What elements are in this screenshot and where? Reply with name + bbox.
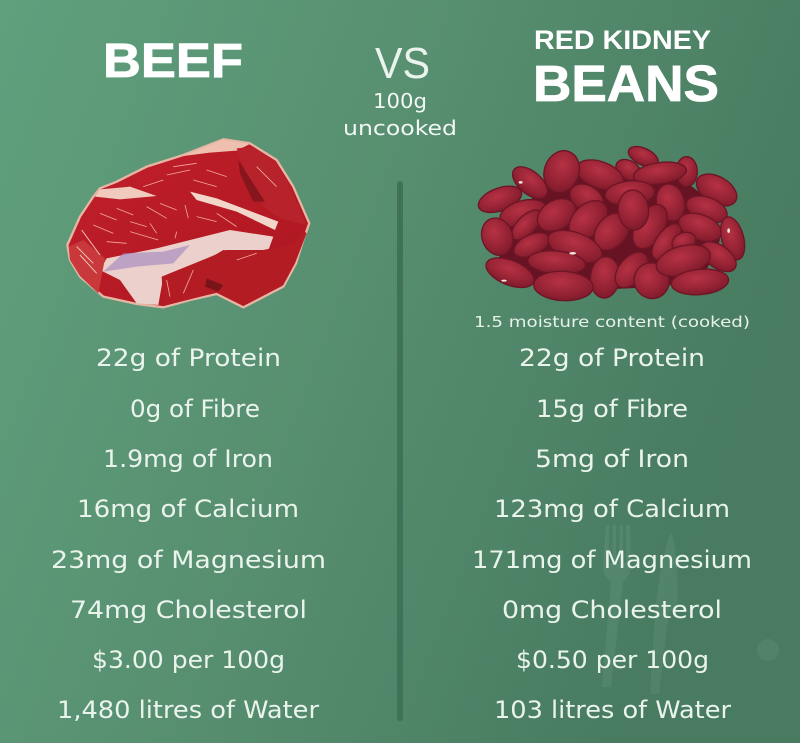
serving note: uncooked [343,116,457,140]
title: red kidney beans: RED KIDNEY [534,25,711,55]
serving note [343,89,457,140]
bean protein: 22g of Protein [519,344,705,372]
image: kidney beans [475,142,749,305]
column: bean nutrition facts [472,344,752,724]
beef water: 1,480 litres of Water [57,696,319,724]
centre divider [397,181,403,721]
bean price: $0.50 per 100g [516,646,709,674]
bean caption: 1.5 moisture content (cooked) [474,313,750,331]
serving note: 100g [373,89,427,113]
bean cholesterol: 0mg Cholesterol [502,596,722,624]
beef price: $3.00 per 100g [92,646,285,674]
image: beef cut [67,139,309,307]
watermark: fork and knife logo [602,525,779,694]
bean water: 103 litres of Water [494,696,731,724]
beef fibre: 0g of Fibre [130,395,260,423]
bean magnesium: 171mg of Magnesium [472,546,752,574]
bean fibre: 15g of Fibre [536,395,688,423]
beef protein: 22g of Protein [96,344,281,372]
title: red kidney beans: BEANS [533,55,719,112]
beef calcium: 16mg of Calcium [77,495,299,523]
bean pile shadow [497,167,720,290]
vs heading: VS [375,39,430,88]
bean iron: 5mg of Iron [535,445,689,473]
beef cholesterol: 74mg Cholesterol [70,596,307,624]
title: beef: BEEF [103,35,243,88]
beef iron: 1.9mg of Iron [103,445,273,473]
title: red kidney beans [533,25,719,112]
bean calcium: 123mg of Calcium [494,495,730,523]
beef magnesium: 23mg of Magnesium [51,546,326,574]
column: beef nutrition facts [51,344,326,724]
